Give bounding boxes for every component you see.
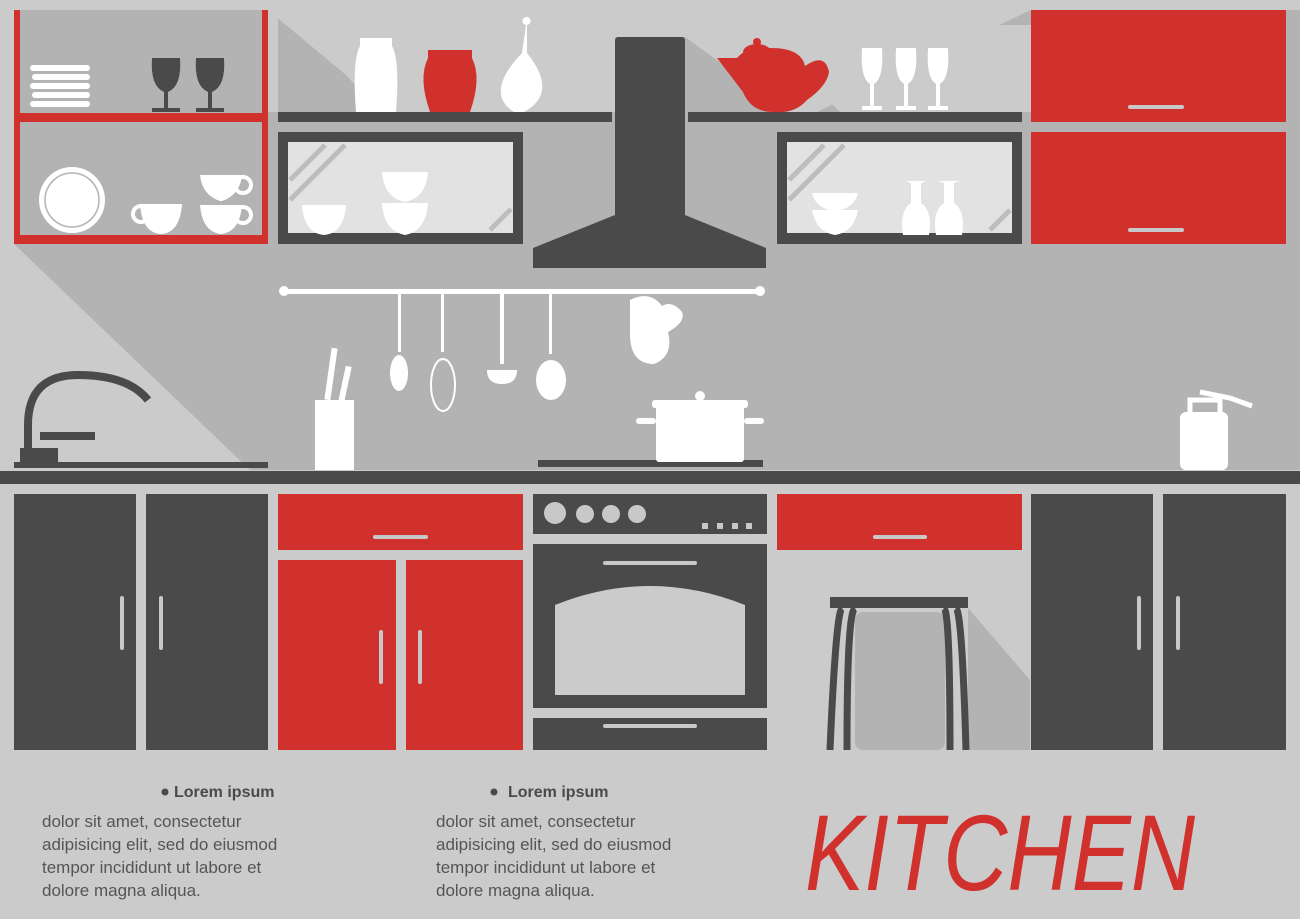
countertop [0,471,1300,484]
faucet [28,375,148,460]
plates stack [30,65,90,107]
upper red cabinets [1031,10,1286,244]
shelf 2 with teapot and glasses [688,38,1022,122]
wine glasses dark [152,58,224,112]
right dark cabinets [1031,494,1286,750]
stool [830,597,1030,750]
red drawer right [777,494,1022,550]
shelf 1 with jars [278,17,612,122]
text block 1: dolor sit amet, consectetur [42,812,242,831]
text block 2: tempor incididunt ut labore et [436,858,656,877]
text block 1 [42,784,277,900]
utensil rail [279,286,765,411]
glass cabinet left [278,132,523,244]
text block 1: dolore magna aliqua. [42,881,201,900]
glass cabinet right [777,132,1022,244]
pot on hob [538,391,764,467]
wall shadow [14,10,1300,470]
KITCHEN title: KITCHEN [805,792,1196,913]
knife block [315,348,354,470]
red lower cabinets [278,494,523,750]
left dark cabinets [14,494,268,750]
toaster [1180,392,1252,470]
text block 1: Lorem ipsum [174,784,274,801]
text block 2: dolor sit amet, consectetur [436,812,636,831]
text block 1: adipisicing elit, sed do eiusmod [42,835,277,854]
left open red shelf [14,10,268,244]
oven [533,494,767,750]
text block 2 [436,784,671,900]
text block 1: tempor incididunt ut labore et [42,858,262,877]
text block 2: Lorem ipsum [508,784,608,801]
range hood [533,37,766,268]
plate [39,167,105,233]
cups [133,175,251,234]
text block 2: dolore magna aliqua. [436,881,595,900]
text block 2: adipisicing elit, sed do eiusmod [436,835,671,854]
